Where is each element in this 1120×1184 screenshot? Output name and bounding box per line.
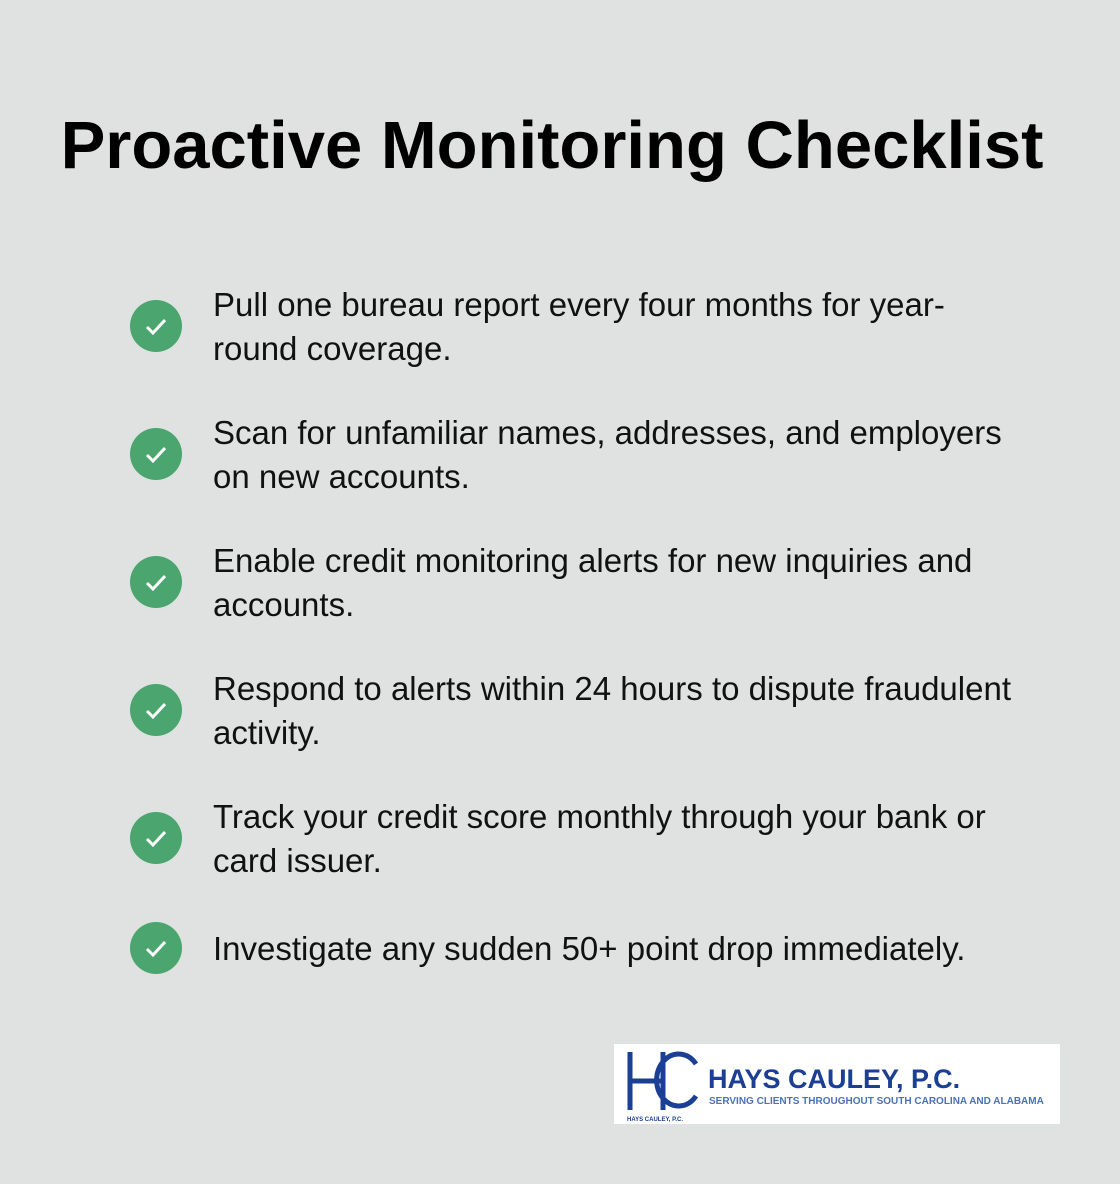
icon: check [130,922,182,974]
text 1: Pull one bureau report every four months for year- [213,286,945,323]
item 6 [130,922,965,974]
text 5: Track your credit score monthly through your bank or [213,798,986,835]
icon: check [130,684,182,736]
text 3 [213,542,972,623]
logo name: HAYS CAULEY, P.C. [708,1064,960,1094]
text 2: Scan for unfamiliar names, addresses, and employers [213,414,1002,451]
icon: check [130,812,182,864]
text 1 [213,286,945,367]
title: Proactive Monitoring Checklist [61,108,1043,183]
item 4 [130,670,1011,751]
icon: check [130,428,182,480]
text 4: activity. [213,714,321,751]
item 5 [130,798,986,879]
icon: check [130,556,182,608]
text 5: card issuer. [213,842,382,879]
text 4: Respond to alerts within 24 hours to dispute fraudulent [213,670,1011,707]
text 4 [213,670,1011,751]
text 3: accounts. [213,586,354,623]
logo mark [630,1052,696,1110]
item 2 [130,414,1002,495]
icon: check [130,300,182,352]
item 3 [130,542,972,623]
logo: HAYS CAULEY, P.C. [627,1117,683,1123]
text 1: round coverage. [213,330,452,367]
logo tagline: SERVING CLIENTS THROUGHOUT SOUTH CAROLINA AND ALABAMA [709,1096,1044,1107]
text 6: Investigate any sudden 50+ point drop immediately. [213,930,965,967]
text 3: Enable credit monitoring alerts for new inquiries and [213,542,972,579]
text 2 [213,414,1002,495]
text 2: on new accounts. [213,458,470,495]
item 1 [130,286,945,367]
text 5 [213,798,986,879]
logo [614,1044,1060,1124]
